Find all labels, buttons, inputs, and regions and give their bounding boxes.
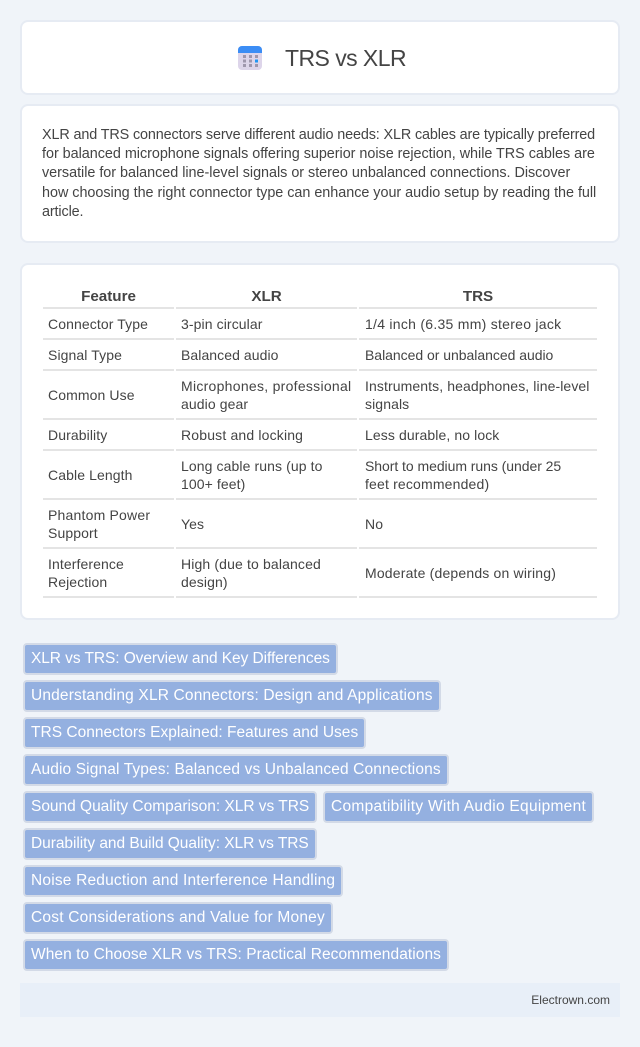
comparison table panel [20,263,620,620]
table header: XLR: XLR [251,288,282,305]
icon: calendar [238,46,262,70]
chip: compatibility: Compatibility With Audio Equipment [331,798,586,815]
chip: cost: Cost Considerations and Value for Money [31,909,325,926]
intro paragraph: XLR and TRS connectors serve different audio needs: XLR cables are typically preferred [42,127,595,143]
comparison table: design) [181,574,228,590]
comparison table: Short to medium runs (under 25 [365,458,561,474]
comparison table: 100+ feet) [181,476,245,492]
chip: noise reduction [23,865,343,897]
chip: TRS connectors [23,717,366,749]
row: interference rejection: Interference [48,556,124,572]
comparison table: Less durable, no lock [365,427,499,443]
comparison table: Microphones, professional [181,378,351,394]
row: cable length: Cable Length [48,467,132,483]
comparison table: Robust and locking [181,427,303,443]
row: connector type: Connector Type [48,316,148,332]
intro paragraph: for balanced microphone signals offering superior noise rejection, while TRS cables are [42,146,595,162]
intro paragraph [42,127,596,220]
comparison table: Balanced audio [181,347,279,363]
row: phantom power support: Phantom Power [48,507,150,523]
chip: durability [23,828,317,860]
chip: cost [23,902,333,934]
chip: sound quality [23,791,317,823]
comparison table: Yes [181,516,204,532]
row: common use: Common Use [48,387,135,403]
comparison table: 1/4 inch (6.35 mm) stereo jack [365,316,561,332]
intro paragraph: versatile for balanced line-level signals or stereo unbalanced connections. Discover [42,165,570,181]
chip: overview [23,643,338,675]
comparison table: Instruments, headphones, line-level [365,378,590,394]
comparison table: Balanced or unbalanced audio [365,347,553,363]
chip: TRS connectors: TRS Connectors Explained: Features and Uses [31,724,358,741]
comparison table: signals [365,396,409,412]
row: signal type: Signal Type [48,347,122,363]
chip: XLR connectors: Understanding XLR Connectors: Design and Applications [31,687,433,704]
comparison table: Long cable runs (up to [181,458,323,474]
title: TRS vs XLR [285,45,406,71]
chip: signal types: Audio Signal Types: Balanced vs Unbalanced Connections [31,761,441,778]
table header: Feature: Feature [81,288,136,305]
comparison table: No [365,516,383,532]
chip: durability: Durability and Build Quality: XLR vs TRS [31,835,309,852]
comparison table [43,288,597,598]
chip: noise reduction: Noise Reduction and Interference Handling [31,872,335,889]
intro paragraph: how choosing the right connector type can enhance your audio setup by reading the full [42,185,596,201]
footer bar [20,983,620,1017]
chip: signal types [23,754,449,786]
comparison table: 3-pin circular [181,316,263,332]
footer credit: Electrown.com [531,993,610,1007]
comparison table: Support [48,525,98,541]
chip: recommendations [23,939,449,971]
comparison table: feet recommended) [365,476,489,492]
chip: compatibility [323,791,594,823]
comparison table: Moderate (depends on wiring) [365,565,556,581]
intro text panel [20,104,620,243]
chip: overview: XLR vs TRS: Overview and Key Differences [31,650,330,667]
chip: XLR connectors [23,680,441,712]
comparison table: audio gear [181,396,248,412]
header panel [20,20,620,95]
row: durability: Durability [48,427,107,443]
chip: recommendations: When to Choose XLR vs TRS: Practical Recommendations [31,946,441,963]
comparison table: Rejection [48,574,107,590]
intro paragraph: article. [42,204,83,220]
table header: TRS: TRS [463,288,493,305]
comparison table: High (due to balanced [181,556,321,572]
chip: sound quality: Sound Quality Comparison: XLR vs TRS [31,798,309,815]
